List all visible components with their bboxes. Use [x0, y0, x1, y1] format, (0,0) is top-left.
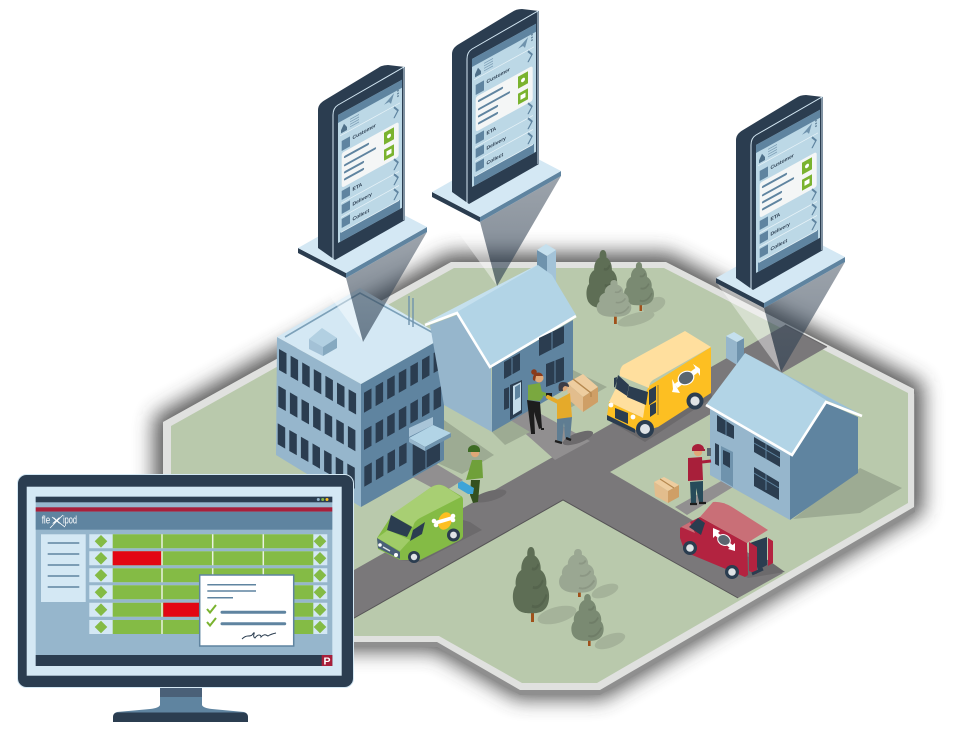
- P badge: [322, 655, 332, 668]
- windows: [715, 415, 780, 500]
- main roof: [457, 265, 576, 367]
- office building: [276, 288, 451, 507]
- front wall: [492, 320, 573, 432]
- phone edge: [467, 11, 538, 206]
- roof trim: [425, 313, 576, 367]
- woman customer: [527, 369, 552, 433]
- red van: [680, 502, 773, 579]
- phone screen: ETA: [486, 126, 496, 137]
- van roof: [620, 331, 711, 388]
- side windows: [649, 386, 656, 417]
- side menu: [41, 534, 86, 602]
- flexipod logo: ipod: [63, 514, 77, 526]
- desktop monitor: [18, 474, 354, 722]
- gable wall: [430, 315, 492, 432]
- platform: [298, 202, 427, 278]
- windscreen: [614, 375, 648, 405]
- monitor stand: [113, 688, 248, 722]
- van side: [640, 347, 711, 432]
- office door: [413, 428, 440, 476]
- windscreen: [689, 518, 705, 535]
- van logo: [432, 510, 455, 532]
- bumper: [377, 538, 400, 559]
- van front: [607, 402, 643, 432]
- application window: [36, 497, 332, 666]
- phone screen: Collect: [352, 208, 369, 223]
- phone screen: Delivery: [486, 136, 506, 152]
- app header: [36, 512, 332, 530]
- phone screen: Customer: [486, 67, 510, 85]
- platform shadow: [163, 262, 914, 690]
- green van: [377, 485, 463, 563]
- phone screen: Customer: [770, 153, 794, 171]
- window title bar: [36, 497, 332, 502]
- roof box: [309, 328, 337, 356]
- footer bar: [36, 655, 332, 666]
- phone screen: ETA: [352, 182, 362, 193]
- ground shadows: [361, 294, 902, 653]
- phone left on platform: [298, 65, 427, 342]
- phone body: [318, 65, 405, 260]
- phone screen: ETA: [770, 212, 780, 223]
- cone left light: [298, 252, 363, 342]
- check marks: [207, 605, 216, 626]
- van roof: [391, 485, 461, 527]
- office right wall: [361, 337, 444, 507]
- tree mid: [571, 594, 604, 646]
- van hood: [377, 530, 410, 551]
- phone middle on platform: [432, 9, 561, 286]
- office roof: [277, 288, 444, 384]
- P badge: P: [323, 656, 331, 668]
- van hood: [609, 388, 645, 418]
- diamonds left: [95, 535, 107, 633]
- row cells light: [89, 534, 327, 634]
- windows left wall: [278, 349, 356, 489]
- bumper: [607, 415, 635, 433]
- column dividers: [162, 534, 263, 634]
- parcel by house: [567, 374, 598, 412]
- flexipod logo: fle: [42, 514, 50, 526]
- front wall: [710, 408, 790, 520]
- chimney: [726, 332, 744, 365]
- phone screen: [756, 110, 820, 273]
- grass: [171, 268, 908, 683]
- technician with toolbox: [458, 445, 483, 503]
- proof of delivery card: [200, 575, 294, 646]
- tree light: [597, 280, 631, 324]
- house behind office: [425, 244, 576, 432]
- van logo: [672, 364, 700, 393]
- house door: [510, 380, 522, 420]
- rear doors: [749, 538, 773, 574]
- door: [721, 446, 733, 487]
- lower trees: [513, 547, 604, 646]
- grille: [615, 408, 628, 424]
- side window: [410, 522, 425, 541]
- upper trees: [586, 250, 654, 324]
- form lines: [222, 612, 285, 624]
- antennas: [409, 296, 413, 327]
- pathways: [412, 408, 733, 515]
- diamonds right: [314, 535, 326, 633]
- main roof: [706, 353, 826, 455]
- yellow jacket courier: [548, 382, 572, 443]
- door canopy: [409, 425, 451, 451]
- cone: [480, 176, 561, 286]
- rear opening: [750, 537, 767, 570]
- red band: [36, 507, 332, 512]
- windows right wall: [364, 349, 441, 487]
- phone screen: Delivery: [352, 192, 372, 208]
- windscreen: [387, 515, 412, 537]
- phone screen: [338, 80, 402, 243]
- yellow van: [607, 331, 711, 438]
- platform: [716, 232, 845, 308]
- red cells: [113, 551, 213, 617]
- gable wall: [790, 403, 858, 520]
- phone right on platform: [716, 95, 845, 372]
- roof parapet: [285, 293, 437, 337]
- schedule table: [89, 534, 327, 634]
- window frames: [512, 332, 555, 383]
- red courier: [688, 444, 711, 504]
- phone screen: Collect: [770, 238, 787, 253]
- phone screen: Delivery: [770, 222, 790, 238]
- tree dark: [513, 547, 549, 622]
- van side: [377, 485, 463, 560]
- office left wall: [276, 337, 361, 507]
- tree mid: [624, 262, 654, 311]
- platform border: [163, 262, 914, 690]
- platform side edge: [163, 267, 915, 695]
- van roof: [700, 502, 768, 543]
- house windows: [504, 326, 564, 410]
- van side: [680, 517, 748, 577]
- phone body: [736, 95, 823, 290]
- road network: [340, 325, 827, 626]
- phone screen: [472, 24, 536, 187]
- tree dark: [586, 250, 620, 308]
- monitor bezel: [18, 474, 354, 688]
- tree light: [559, 549, 597, 597]
- flexipod logo: x: [52, 514, 62, 526]
- back roof: [425, 265, 550, 323]
- office sign: [409, 417, 433, 437]
- cone: [346, 232, 427, 342]
- phone screen: Collect: [486, 152, 503, 167]
- back roof: [745, 353, 862, 415]
- signature: [242, 633, 276, 639]
- phone screen: Customer: [352, 123, 376, 141]
- row cells green: [113, 534, 313, 634]
- road shadows: [400, 390, 785, 578]
- phone body: [452, 9, 539, 204]
- cone left light: [716, 282, 781, 372]
- cone: [764, 262, 845, 372]
- window frames: [726, 420, 780, 490]
- van bonnet: [681, 522, 695, 533]
- platform: [432, 146, 561, 222]
- house on the right: [706, 332, 862, 520]
- flexipod logo: [42, 514, 77, 528]
- monitor screen: [27, 487, 342, 676]
- chimney: [537, 244, 556, 282]
- phone edge: [751, 97, 822, 292]
- phone edge: [333, 67, 404, 262]
- van logo: [713, 528, 735, 551]
- roof trim: [706, 402, 862, 455]
- parcel by courier: [654, 477, 679, 503]
- cone left light: [432, 196, 497, 286]
